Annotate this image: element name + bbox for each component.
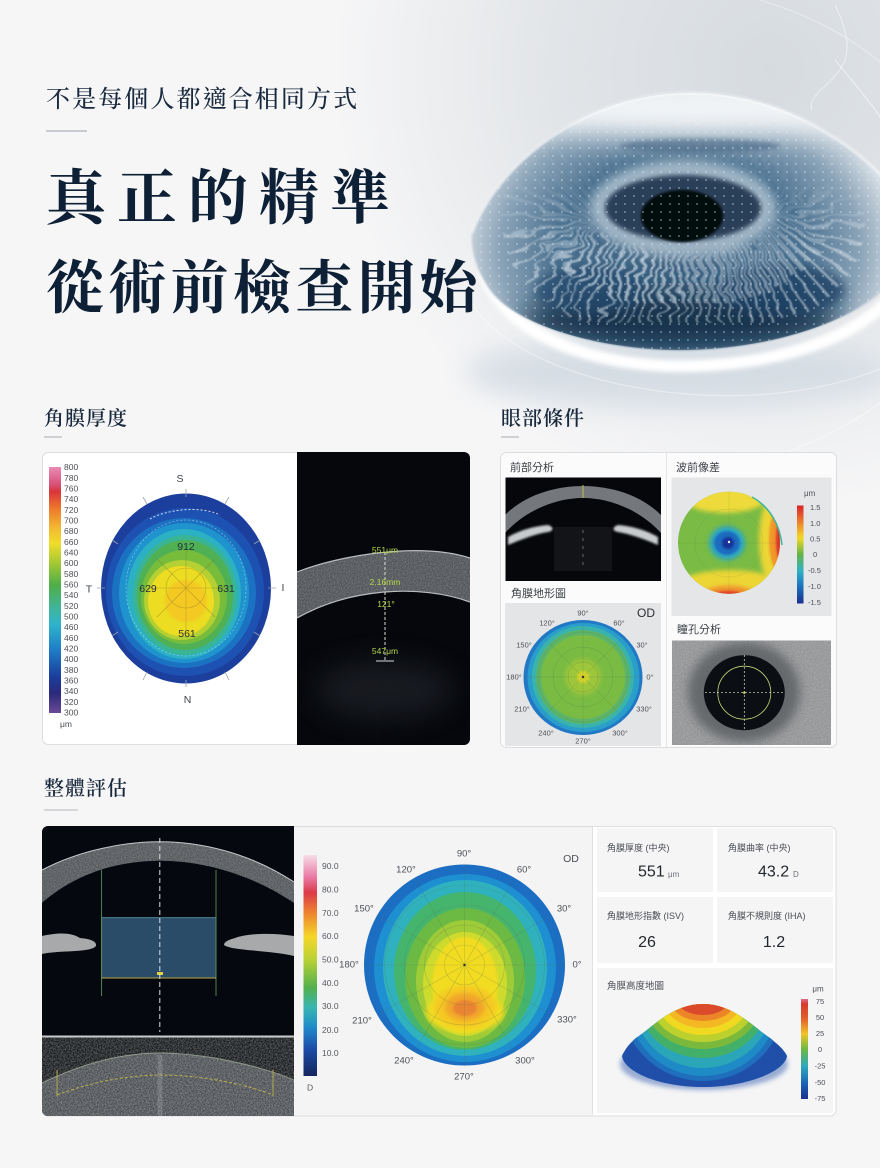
- stat card: ISV: [597, 897, 713, 963]
- colour scale: dioptres: 20.0: [322, 1025, 339, 1035]
- stat card: corneal thickness: [597, 828, 713, 892]
- curvature map angle labels: OD: [563, 853, 579, 865]
- stat card: corneal curvature: D: [793, 870, 799, 879]
- colour scale: dioptres: 80.0: [322, 884, 339, 894]
- thickness map values: 912: [177, 541, 195, 553]
- orientation letters: T: [86, 584, 93, 596]
- sub-panel: corneal topography: 60°: [613, 618, 625, 628]
- elevation scale: -25: [815, 1062, 825, 1070]
- curvature map angle labels: 0°: [572, 960, 582, 970]
- colour scale: thickness: 380: [64, 665, 78, 675]
- colour scale: thickness: 460: [64, 633, 78, 643]
- colour scale: thickness: μm: [60, 719, 72, 729]
- stat card: IHA: [717, 897, 833, 963]
- subtitle: 不是每個人都適合相同方式: [46, 86, 359, 113]
- sub-panel: corneal topography: 210°: [514, 704, 530, 714]
- colour scale: dioptres: [304, 855, 339, 1092]
- colour scale: thickness: 580: [64, 569, 78, 579]
- thickness map values: 631: [217, 583, 235, 595]
- orientation letters: N: [184, 694, 191, 706]
- orientation letters: I: [282, 582, 284, 594]
- OCT measurements: 121°: [377, 599, 395, 609]
- heading: eye condition: 眼部條件: [501, 407, 585, 430]
- sub-panel: corneal topography: 270°: [575, 736, 591, 746]
- colour scale: thickness: 540: [64, 590, 78, 600]
- colour scale: thickness: 680: [64, 526, 78, 536]
- OCT scans: [42, 826, 294, 1116]
- elevation scale: 75: [816, 997, 824, 1006]
- elevation scale: 25: [816, 1029, 824, 1038]
- colour scale: thickness: 420: [64, 644, 78, 654]
- OCT measurements: 547μm: [372, 646, 398, 656]
- orientation letters: [86, 473, 284, 706]
- elevation scale: -75: [815, 1094, 825, 1103]
- curvature map angle labels: [339, 848, 582, 1082]
- sub-panel: anterior segment: [505, 460, 661, 581]
- curvature map: [364, 864, 565, 1066]
- sub-panel: corneal topography: 0°: [646, 672, 654, 682]
- curvature map angle labels: 330°: [557, 1014, 577, 1026]
- elevation scale: 0: [818, 1045, 822, 1054]
- colour scale: thickness: 400: [64, 654, 78, 664]
- map area background: [294, 827, 592, 1116]
- elevation dome: [617, 1004, 791, 1093]
- sub-panel: corneal topography: 150°: [516, 640, 532, 650]
- colour scale: thickness: 760: [64, 484, 78, 494]
- stat card: corneal thickness: μm: [668, 870, 680, 879]
- card: corneal elevation map: [597, 968, 833, 1113]
- thickness map: [97, 489, 276, 687]
- stat card: corneal thickness: 551: [638, 864, 665, 880]
- colour scale: dioptres: 60.0: [322, 931, 339, 941]
- stat card: ISV: 26: [638, 934, 656, 951]
- sub-panel: pupil analysis: 瞳孔分析: [677, 622, 721, 636]
- curvature map angle labels: 270°: [454, 1072, 474, 1082]
- sub-panel: corneal topography: [505, 587, 661, 746]
- hero background glow: [0, 0, 880, 520]
- curvature map angle labels: 90°: [457, 848, 471, 860]
- colour scale: dioptres: 90.0: [322, 861, 339, 871]
- stat card: IHA: 角膜不規則度 (IHA): [728, 910, 806, 921]
- sub-panel: wavefront aberration: [670, 460, 832, 616]
- main title: 從術前檢查開始: [46, 256, 483, 321]
- sub-panel: corneal topography: 180°: [506, 672, 522, 682]
- curvature map angle labels: 60°: [517, 864, 531, 876]
- colour scale: thickness: [49, 462, 78, 729]
- colour scale: thickness: 600: [64, 558, 78, 568]
- colour scale: thickness: 780: [64, 473, 78, 483]
- sub-panel: corneal topography: OD: [637, 606, 655, 620]
- sub-panel: wavefront aberration: -1.0: [808, 582, 821, 591]
- sub-panel: wavefront aberration: μm: [804, 489, 816, 498]
- colour scale: dioptres: 10.0: [322, 1048, 339, 1058]
- colour scale: thickness: 720: [64, 505, 78, 515]
- heading: corneal thickness: 角膜厚度: [44, 407, 128, 430]
- colour scale: dioptres: 70.0: [322, 908, 339, 918]
- stat card: IHA: 1.2: [763, 934, 785, 951]
- sub-panel: wavefront aberration: 波前像差: [676, 460, 720, 474]
- elevation scale: [801, 984, 825, 1103]
- sub-panel: wavefront aberration: 1.5: [810, 503, 820, 512]
- thickness map values: 561: [178, 628, 196, 640]
- hero illustration: digital eye dome: [460, 0, 880, 455]
- colour scale: thickness: 560: [64, 580, 78, 590]
- colour scale: thickness: 800: [64, 462, 78, 472]
- heading: overall assessment: 整體評估: [44, 777, 128, 800]
- curvature map angle labels: 30°: [557, 904, 571, 914]
- sub-panel: wavefront aberration: 0.5: [810, 534, 820, 544]
- panel: eye condition: [500, 452, 836, 748]
- OCT measurements: 551μm: [372, 545, 398, 555]
- elevation scale: 50: [816, 1013, 824, 1022]
- sub-panel: wavefront aberration: 1.0: [810, 519, 820, 528]
- OCT cross-section: [297, 452, 470, 745]
- sub-panel: corneal topography: 120°: [539, 618, 555, 628]
- sub-panel: corneal topography: 角膜地形圖: [511, 587, 566, 600]
- colour scale: thickness: 500: [64, 612, 78, 622]
- stat card: ISV: 角膜地形指數 (ISV): [607, 910, 684, 921]
- stat card: corneal curvature: [717, 828, 833, 892]
- sub-panel: corneal topography: 330°: [636, 704, 652, 714]
- sub-panel: corneal topography: 300°: [612, 728, 628, 738]
- colour scale: thickness: 300: [64, 708, 78, 718]
- curvature map angle labels: 120°: [396, 864, 416, 876]
- stat card: corneal thickness: 角膜厚度 (中央): [607, 842, 670, 853]
- curvature map angle labels: 240°: [394, 1056, 414, 1066]
- curvature map angle labels: 150°: [354, 904, 374, 914]
- thickness map values: [139, 541, 235, 640]
- panel: corneal thickness: [42, 452, 470, 745]
- sub-panel: corneal topography: 30°: [636, 640, 648, 650]
- stat card: corneal curvature: 43.2: [758, 864, 789, 880]
- colour scale: thickness: 520: [64, 601, 78, 611]
- colour scale: thickness: 340: [64, 686, 78, 696]
- sub-panel: corneal topography: 90°: [577, 608, 589, 618]
- colour scale: dioptres: 40.0: [322, 978, 339, 988]
- colour scale: thickness: 360: [64, 676, 78, 686]
- thickness map values: 629: [139, 583, 157, 595]
- colour scale: thickness: 320: [64, 697, 78, 707]
- sub-panel: wavefront aberration: -1.5: [808, 598, 821, 607]
- colour scale: thickness: 740: [64, 494, 78, 504]
- colour scale: dioptres: D: [307, 1082, 313, 1092]
- main title: [46, 166, 483, 321]
- colour scale: thickness: 460: [64, 622, 78, 632]
- elevation scale: μm: [812, 984, 824, 994]
- colour scale: thickness: 640: [64, 548, 78, 558]
- OCT measurements: [370, 545, 400, 656]
- colour scale: thickness: 700: [64, 516, 78, 526]
- elevation scale: -50: [815, 1078, 825, 1087]
- curvature map angle labels: 300°: [515, 1056, 535, 1066]
- orientation letters: S: [176, 473, 184, 485]
- colour scale: dioptres: 30.0: [322, 1001, 339, 1011]
- panel: overall assessment: [42, 826, 836, 1116]
- sub-panel: wavefront aberration: 0: [813, 550, 817, 559]
- card: corneal elevation map: 角膜高度地圖: [607, 980, 664, 992]
- sub-panel: pupil analysis: [672, 622, 831, 745]
- colour scale: thickness: 660: [64, 537, 78, 547]
- sub-panel: anterior segment: 前部分析: [510, 460, 554, 474]
- OCT measurements: 2.16mm: [370, 577, 400, 587]
- sub-panel: corneal topography: 240°: [538, 728, 554, 738]
- colour scale: dioptres: 50.0: [322, 954, 339, 964]
- curvature map angle labels: 180°: [339, 960, 359, 970]
- stat card: corneal curvature: 角膜曲率 (中央): [728, 842, 790, 853]
- curvature map angle labels: 210°: [352, 1016, 372, 1026]
- main title: 真正的精準: [46, 166, 401, 232]
- sub-panel: wavefront aberration: -0.5: [808, 566, 821, 575]
